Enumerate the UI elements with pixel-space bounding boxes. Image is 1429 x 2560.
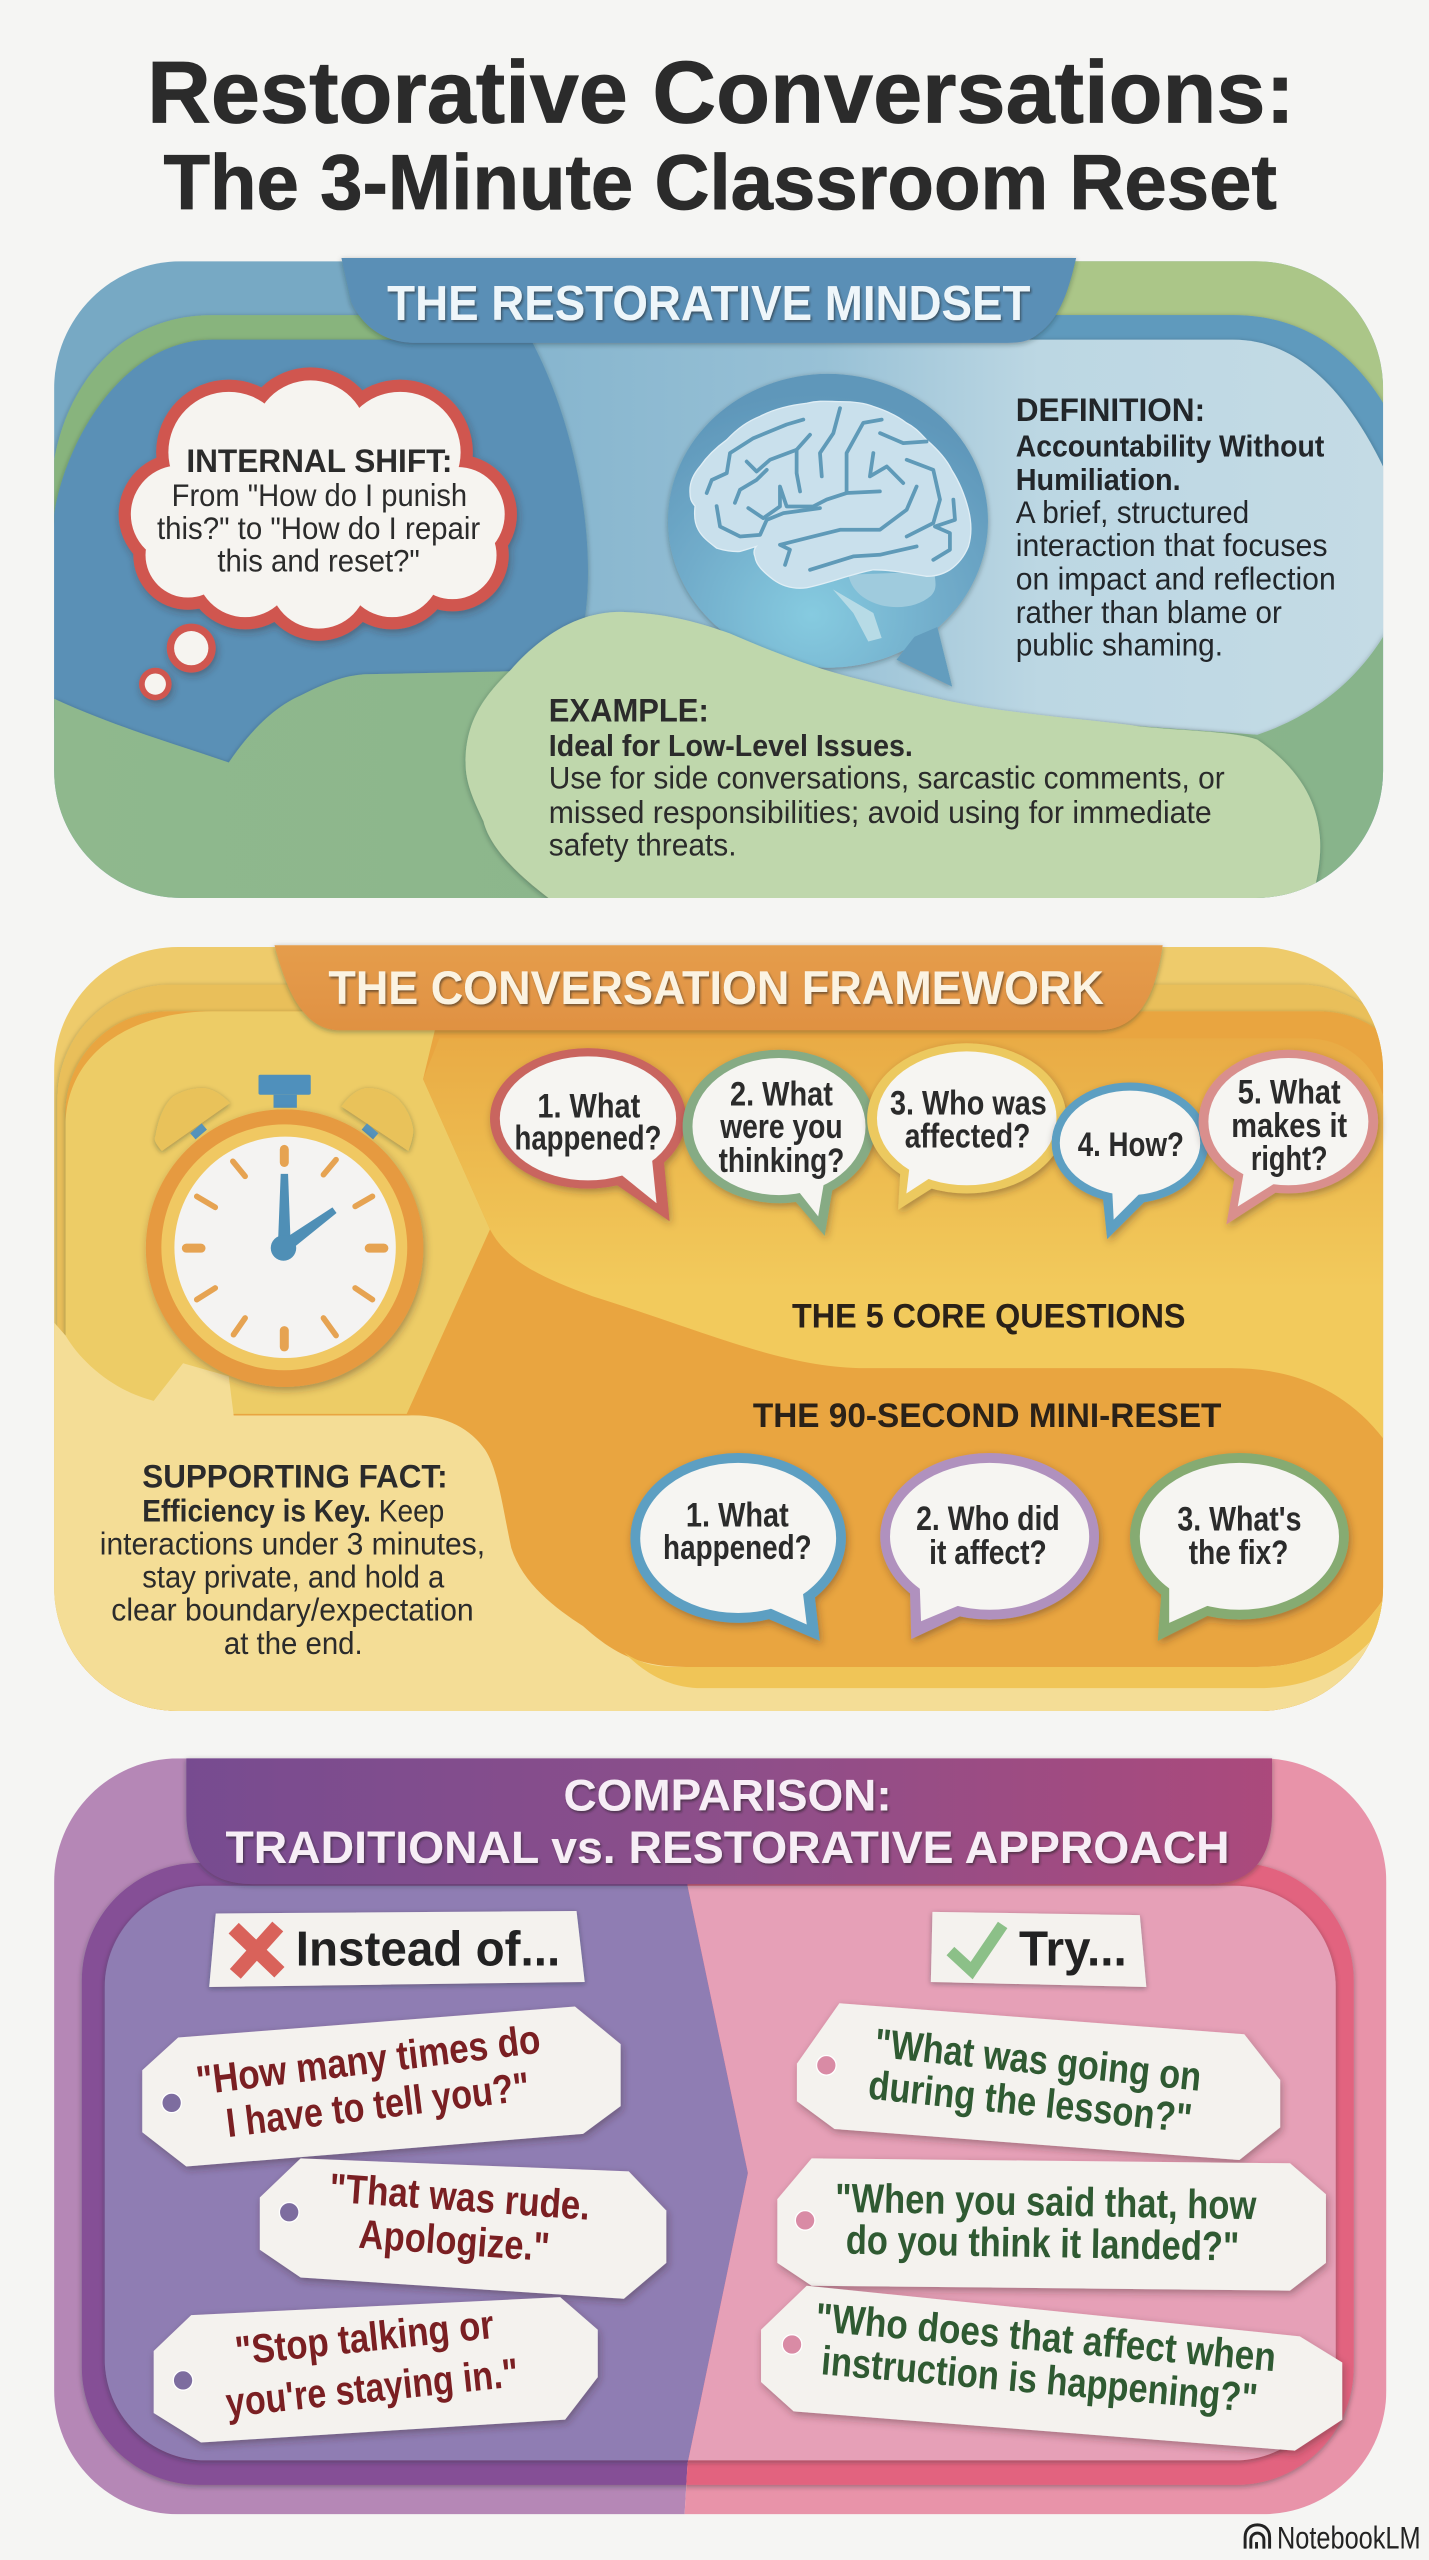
example bubble — [466, 612, 1320, 914]
example text: missed responsibilities; avoid using for immediate — [549, 795, 1212, 830]
title — [147, 42, 1295, 226]
tag: stop talking: "Stop talking or — [233, 2301, 496, 2374]
label: instead of: Instead of... — [296, 1923, 560, 1977]
header: comparison — [186, 1758, 1272, 1884]
tag: that was rude — [260, 2158, 666, 2299]
tag: what was going on: during the lesson?" — [866, 2062, 1194, 2141]
example text: EXAMPLE: — [549, 692, 709, 729]
bubble: question 3: affected? — [905, 1118, 1030, 1156]
panel: the conversation framework — [54, 945, 1421, 1736]
example text: Ideal for Low-Level Issues. — [549, 730, 913, 763]
supporting fact text: at the end. — [224, 1626, 363, 1661]
definition text: interaction that focuses — [1016, 528, 1328, 563]
tag: what was going on: "What was going on — [872, 2020, 1204, 2100]
tag: that was rude: Apologize." — [357, 2211, 551, 2270]
tag: stop talking: you're staying in." — [224, 2349, 521, 2426]
bubble: mini-reset 3: 3. What's — [1177, 1501, 1301, 1539]
tag: who does that affect: "Who does that affect when — [814, 2294, 1278, 2380]
internal shift text: this and reset?" — [217, 543, 420, 578]
panel: comparison — [54, 1758, 1386, 2514]
bubble: mini-reset 3: the fix? — [1189, 1534, 1288, 1572]
bubble: question 4: 4. How? — [1078, 1126, 1184, 1164]
icon: green check — [950, 1925, 1003, 1971]
label: try — [931, 1912, 1146, 1987]
five core questions bubbles — [490, 1043, 1378, 1239]
bubble: mini-reset 2: 2. Who did — [916, 1500, 1060, 1538]
tag: how many times: "How many times do — [194, 2016, 543, 2104]
bubble: question 2: 2. What — [730, 1075, 833, 1113]
tag: when you said that: "When you said that, how — [835, 2175, 1257, 2228]
supporting fact text: SUPPORTING FACT: — [142, 1457, 448, 1494]
internal shift text: this?" to "How do I repair — [157, 511, 480, 546]
bubble: question 5 — [1199, 1050, 1378, 1224]
panel 2 paper layers — [54, 947, 1421, 1736]
definition text: Humiliation. — [1016, 464, 1181, 497]
tag: that was rude: "That was rude. — [328, 2165, 592, 2229]
definition text: Accountability Without — [1016, 430, 1324, 463]
bubble: question 1 — [490, 1048, 686, 1221]
icon: notebooklm logo — [1245, 2525, 1270, 2549]
header: the restorative mindset — [341, 258, 1076, 343]
supporting fact text: clear boundary/expectation — [111, 1592, 474, 1627]
bubble: question 2: thinking? — [719, 1142, 844, 1180]
bubble: question 1: happened? — [514, 1119, 661, 1157]
bubble: question 2: were you — [719, 1108, 843, 1146]
bubble: question 1: 1. What — [537, 1088, 640, 1126]
header: comparison: COMPARISON: — [563, 1772, 892, 1821]
bubble: question 3 — [867, 1043, 1066, 1210]
bubble: mini-reset 2 — [880, 1453, 1099, 1639]
bubble: mini-reset 1: 1. What — [686, 1497, 789, 1535]
bubble: question 2 — [683, 1050, 875, 1236]
panel 3 paper layers — [54, 1758, 1386, 2514]
bubble: mini-reset 3 — [1130, 1453, 1349, 1641]
icon: red x — [234, 1927, 279, 1974]
header: the restorative mindset: THE RESTORATIVE MINDSET — [387, 277, 1030, 331]
tag: stop talking — [154, 2297, 598, 2442]
bubble: question 5: makes it — [1231, 1107, 1347, 1145]
example text: safety threats. — [549, 828, 737, 863]
internal shift text — [157, 442, 480, 578]
tag: who does that affect — [761, 2286, 1342, 2451]
mini-reset bubbles — [630, 1453, 1349, 1641]
header: comparison: TRADITIONAL vs. RESTORATIVE APPROACH — [226, 1822, 1230, 1873]
definition text: on impact and reflection — [1016, 561, 1336, 596]
bubble: question 4 — [1052, 1082, 1208, 1239]
tag: what was going on — [797, 2003, 1280, 2160]
definition text: A brief, structured — [1016, 495, 1249, 530]
speech circle with brain icon — [668, 374, 988, 687]
label: instead of — [209, 1911, 585, 1987]
bubble: mini-reset 1: happened? — [663, 1529, 812, 1567]
tag: who does that affect: instruction is happening?" — [820, 2337, 1260, 2421]
example text: Use for side conversations, sarcastic comments, or — [549, 761, 1225, 796]
tag: when you said that: do you think it landed?" — [845, 2217, 1240, 2270]
example text — [549, 692, 1225, 863]
definition text: rather than blame or — [1016, 595, 1282, 630]
definition text: DEFINITION: — [1016, 391, 1205, 428]
label: the 5 core questions: THE 5 CORE QUESTIONS — [792, 1297, 1186, 1335]
definition text — [1016, 391, 1336, 663]
supporting fact text — [100, 1457, 485, 1661]
header: the conversation framework: THE CONVERSATION FRAMEWORK — [328, 962, 1104, 1015]
label: the 90-second mini-reset: THE 90-SECOND MINI-RESET — [753, 1397, 1221, 1435]
bubble: mini-reset 2: it affect? — [929, 1534, 1047, 1572]
definition text: public shaming. — [1016, 628, 1223, 663]
panel 1 paper layers — [54, 258, 1388, 914]
bubble: question 3: 3. Who was — [890, 1084, 1047, 1122]
icon: alarm clock — [146, 1075, 423, 1387]
bubble: mini-reset 1 — [630, 1453, 846, 1641]
supporting fact text: Efficiency is Key. Keep — [142, 1494, 444, 1529]
header: the conversation framework — [274, 945, 1163, 1030]
thought cloud: internal shift — [119, 367, 517, 700]
tag: how many times — [142, 2007, 621, 2167]
internal shift text: INTERNAL SHIFT: — [186, 442, 452, 479]
internal shift text: From "How do I punish — [172, 478, 467, 513]
supporting fact text: interactions under 3 minutes, — [100, 1526, 485, 1561]
tag: how many times: I have to tell you?" — [223, 2063, 532, 2146]
supporting fact text: stay private, and hold a — [142, 1560, 445, 1595]
label: try: Try... — [1019, 1923, 1127, 1977]
bubble: question 5: right? — [1251, 1140, 1328, 1178]
panel: the restorative mindset — [54, 258, 1388, 914]
title: The 3-Minute Classroom Reset — [163, 138, 1277, 226]
icon: brain — [690, 401, 971, 641]
title: Restorative Conversations: — [147, 42, 1295, 141]
tag: when you said that — [777, 2158, 1326, 2291]
bubble: question 5: 5. What — [1238, 1074, 1341, 1112]
